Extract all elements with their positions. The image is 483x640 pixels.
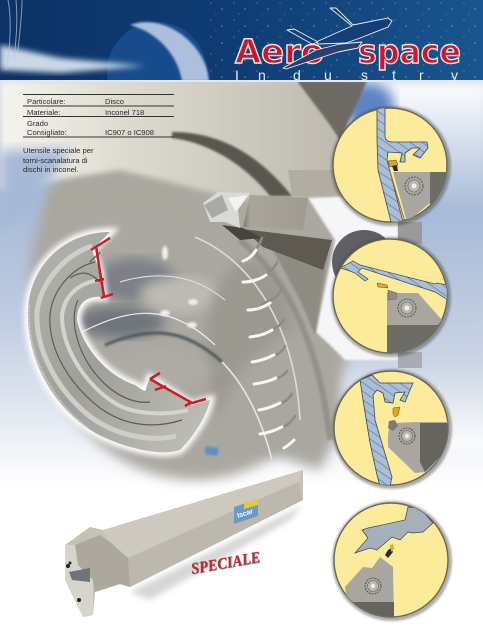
- description text: [23, 146, 94, 174]
- label: SPECIALE: SPECIALE: [190, 549, 262, 578]
- banner bottom highlight: [0, 80, 483, 82]
- spec table: Inconel 718: [105, 108, 144, 117]
- white workpiece area behind tool: [308, 194, 398, 360]
- detail circle 2: [331, 237, 451, 357]
- word Aero: Aero: [235, 32, 324, 71]
- word Industry: n: [258, 67, 266, 83]
- spec table: Particolare:: [27, 97, 65, 106]
- cutting tool holder in photo: [203, 192, 332, 335]
- moon: [107, 20, 210, 80]
- disc grooves: [82, 237, 330, 460]
- grey shaft strips between circles: [398, 222, 422, 368]
- description text: Utensile speciale per: [23, 146, 94, 155]
- detail circle 4: [332, 501, 452, 621]
- word Industry: d: [293, 67, 301, 83]
- metal chips spiral: [243, 238, 295, 448]
- spec table: Materiale:: [27, 108, 60, 117]
- spec table: Grado: [27, 119, 48, 128]
- Iscar logo badge: Iscar: [236, 508, 254, 520]
- word space: space: [358, 32, 461, 71]
- spec table: Consigliato:: [27, 128, 67, 137]
- blurred slate bands: [95, 258, 175, 302]
- spec table: Disco: [105, 97, 124, 106]
- word Industry: I: [235, 67, 239, 83]
- word Industry: [235, 67, 458, 83]
- red disc cross-section bottom: [150, 373, 206, 406]
- airplane outline: [283, 8, 392, 69]
- Iscar logo badge: [234, 499, 258, 524]
- top banner: night sky: [0, 0, 483, 80]
- word Industry: t: [392, 67, 396, 83]
- description text: dischi in inconel.: [23, 165, 79, 174]
- product: grooving tool holder: [65, 470, 303, 617]
- spec table: [23, 94, 174, 137]
- tool holder: soft shadow: [130, 505, 303, 600]
- dark ring behind circle 2: [332, 230, 396, 294]
- silver swarf: [203, 192, 250, 228]
- word Industry: r: [419, 67, 424, 83]
- word Industry: s: [361, 67, 368, 83]
- red disc cross-section top: [91, 238, 113, 298]
- word Industry: y: [451, 67, 458, 83]
- detail circle 1: [331, 105, 451, 226]
- description text: torni-scanalatura di: [23, 156, 88, 165]
- label: SPECIALE: SPECIALE: [191, 550, 262, 579]
- C-shaped cut-away disc: [28, 232, 210, 452]
- spec table: IC907 o IC908: [105, 128, 154, 137]
- word Industry: u: [324, 67, 332, 83]
- logo: Aerospace Industry: [235, 8, 461, 83]
- comet streak: [0, 45, 145, 73]
- detail circle 3: [332, 369, 452, 489]
- photo: spinning disc being machined: [0, 81, 367, 480]
